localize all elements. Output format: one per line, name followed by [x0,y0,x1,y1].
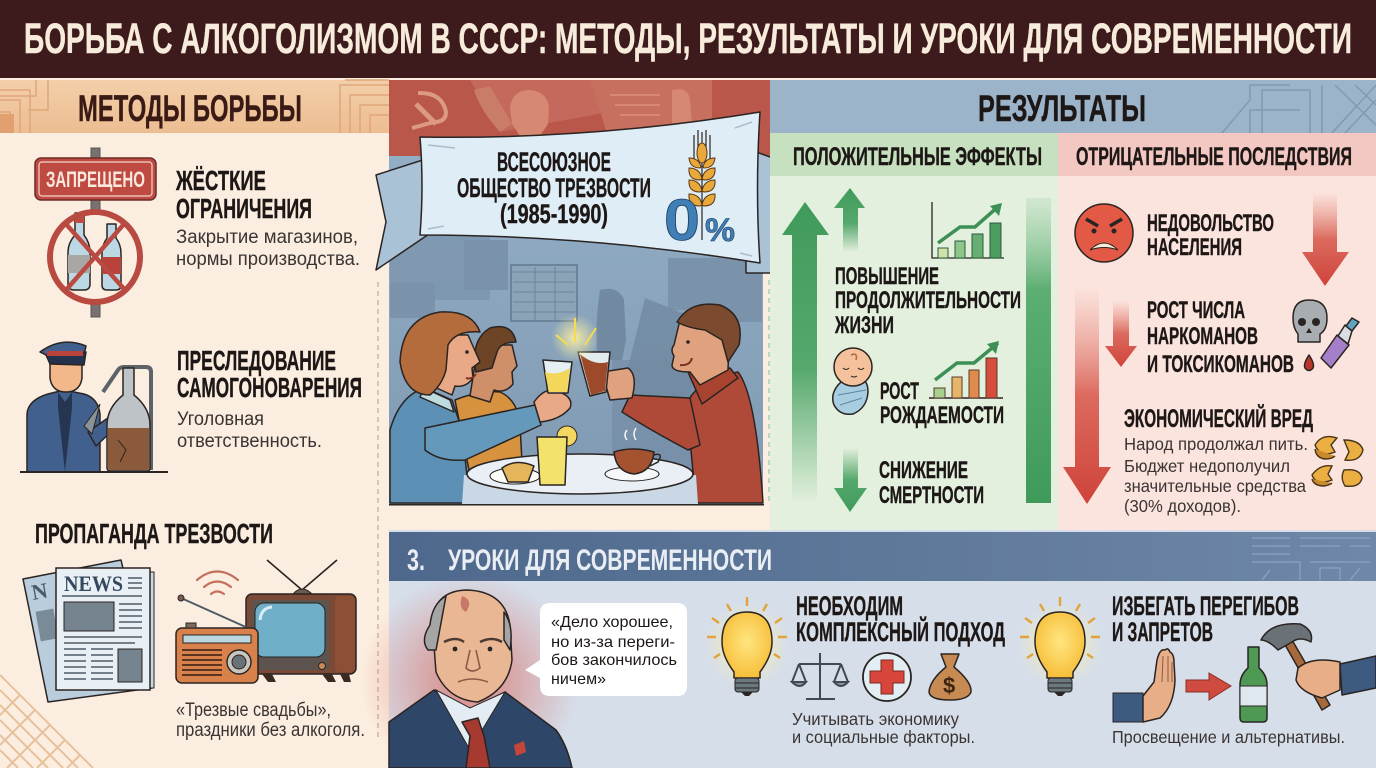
text: life expectancy: ЖИЗНИ [834,312,894,339]
soviet poster background [389,80,770,160]
text: life expectancy [834,263,1021,339]
method: strict restrictions: нормы производства. [176,249,360,270]
method: moonshine prosecution: САМОГОНОВАРЕНИЯ [177,372,362,403]
glass of lemonade [543,360,572,393]
method: sobriety propaganda: праздники без алкоголя. [176,720,365,741]
icon: radio waves [197,572,238,594]
methods heading: МЕТОДЫ БОРЬБЫ [78,88,302,129]
text: economic harm [1124,434,1308,516]
icon: light bulb 1 [705,597,789,696]
arrow: small down green [834,448,867,512]
arrow: small up [834,188,865,252]
text: addicts: И ТОКСИКОМАНОВ [1147,351,1294,378]
icon: television [246,560,356,682]
banner text [457,147,651,229]
method: strict restrictions [35,148,360,317]
heading: positive: ПОЛОЖИТЕЛЬНЫЕ ЭФФЕКТЫ [793,143,1042,171]
heading: comprehensive approach: НЕОБХОДИМ [796,591,903,621]
heading: avoid excess: И ЗАПРЕТОВ [1112,617,1213,647]
icon: broken coins [1312,437,1363,486]
background newspapers and shadows [390,235,762,470]
quote bubble [525,603,687,696]
icon: angry face [1075,204,1133,262]
text: life expectancy: ПОВЫШЕНИЕ [835,263,939,290]
icon: newspapers: N [30,578,50,605]
ribbon banner [376,112,773,273]
icon: radio [176,595,258,683]
text: addicts: НАРКОМАНОВ [1147,323,1258,350]
icon: newspapers [23,560,154,702]
heading: strict restrictions: ЖЁСТКИЕ [175,165,266,196]
text: economic harm: Бюджет недополучил [1124,456,1290,476]
person: boy [455,327,522,475]
text: economic harm: Народ продолжал пить. [1124,434,1308,454]
icon: wheat zero percent: % [705,212,735,248]
heading: moonshine prosecution: ПРЕСЛЕДОВАНИЕ [177,345,336,376]
lessons header [389,532,1376,581]
results heading: РЕЗУЛЬТАТЫ [978,88,1146,129]
results header [770,80,1376,133]
glass of tea [578,352,610,396]
banner text: (1985-1990) [500,199,608,229]
banner text: ВСЕСОЮЗНОЕ [497,147,611,177]
arrow: large up [782,202,829,503]
icon: stop hand [1113,649,1175,722]
quote text: «Дело хорошее, [551,614,673,631]
sparkle [551,314,599,362]
text: comprehensive approach: Учитывать экономику [792,709,959,729]
chart: birth rate [929,341,1003,398]
text: birth rate: РОСТ [880,378,919,405]
chart: life expectancy [932,202,1004,258]
arrow: red down upper [1302,192,1349,286]
quote text: бов закончилось [551,652,677,669]
quote text: но из-за переги- [551,634,675,651]
heading: propaganda: ПРОПАГАНДА ТРЕЗВОСТИ [35,518,273,549]
text: mortality: СМЕРТНОСТИ [879,482,984,509]
text: discontent: НАСЕЛЕНИЯ [1147,234,1242,261]
icon: money bag [929,654,971,700]
column: negative consequences [1058,133,1376,530]
arrow: red down small [1105,300,1137,367]
icon: skull and bottle [1293,300,1359,370]
lessons heading: 3. [407,544,425,577]
arrow: red down large [1063,287,1111,504]
icon: medical cross [863,653,911,701]
quote text [551,614,677,688]
text: avoid excess: Просвещение и альтернативы. [1112,727,1345,747]
text: birth rate: РОЖДАЕМОСТИ [880,402,1004,429]
text: strict restrictions: Закрытие магазинов, [176,227,358,248]
arrow: to bottle [1186,673,1231,700]
text: mortality [879,457,984,509]
title bar [0,0,1376,78]
method: moonshine prosecution: ответственность. [177,431,322,452]
panel: methods [0,78,389,768]
person: woman [390,312,571,503]
icon: wheat zero percent [664,130,735,253]
panel: sobriety society scene [376,78,773,530]
text: comprehensive approach: и социальные факторы. [792,727,975,747]
icon: wheat zero percent: 0 [664,188,700,253]
text: discontent: НЕДОВОЛЬСТВО [1147,210,1274,237]
text: life expectancy: ПРОДОЛЖИТЕЛЬНОСТИ [835,287,1021,314]
method: moonshine prosecution [20,342,362,473]
green vertical bar [1026,198,1051,503]
lessons header: УРОКИ ДЛЯ СОВРЕМЕННОСТИ [448,544,772,577]
heading: comprehensive approach [796,591,1005,647]
text: discontent [1147,210,1274,261]
text: mortality: СНИЖЕНИЕ [879,457,968,484]
icon: light bulb 2 [1018,597,1102,696]
methods header [0,80,389,133]
icon: hammer and hand [1261,624,1376,710]
icon: hammer and sickle [412,93,446,128]
column: positive effects [770,133,1058,530]
portrait: Gorbachev [360,575,580,768]
icon: green bottle [1240,647,1267,722]
text: moonshine prosecution: Уголовная [177,409,264,430]
text: addicts [1147,297,1294,378]
heading: avoid excess [1112,591,1299,647]
icon: baby [833,348,872,414]
quote text: ничем» [551,671,606,688]
panel: results [770,80,1376,530]
person: man [602,304,763,503]
text: economic harm: (30% доходов). [1124,496,1241,516]
banner text: ОБЩЕСТВО ТРЕЗВОСТИ [457,173,651,203]
icon: scales [792,653,848,699]
icon: policeman with still [20,342,168,473]
text: birth rate [880,378,1004,429]
method: sobriety propaganda [23,518,365,741]
table with drinks [462,426,698,504]
method: strict restrictions: ОГРАНИЧЕНИЯ [176,193,312,224]
people toasting [390,304,763,504]
panel: lessons [360,530,1376,768]
icon: money bag: $ [943,673,955,698]
icon: prohibited sign [35,148,156,317]
icon: newspapers: NEWS [64,571,123,596]
text: addicts: РОСТ ЧИСЛА [1147,297,1245,324]
heading: comprehensive approach: КОМПЛЕКСНЫЙ ПОДХОД [796,616,1005,647]
icon: prohibited sign: ЗАПРЕЩЕНО [46,167,145,192]
text: propaganda: «Трезвые свадьбы», [176,700,331,721]
text: economic harm: значительные средства [1124,476,1306,496]
text: comprehensive approach [792,709,975,747]
decorative corner pattern [0,675,93,768]
